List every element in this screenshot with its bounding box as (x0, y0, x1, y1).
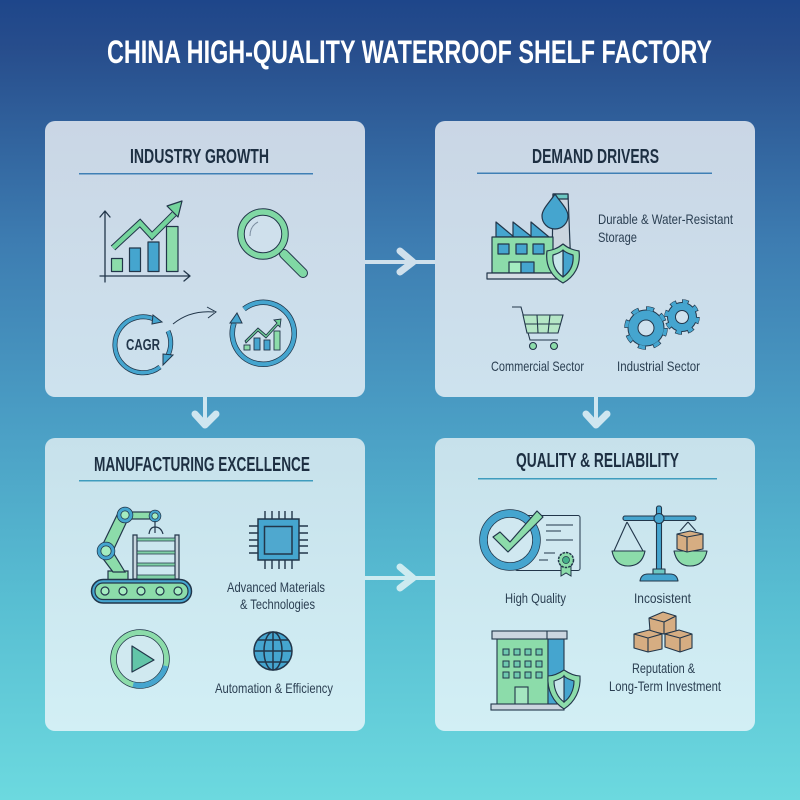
arrow: CAGR to growth ring (173, 307, 216, 324)
label: reputation: Reputation & (632, 660, 696, 676)
icon: magnifier (241, 212, 303, 273)
icon: growth chart (100, 201, 190, 282)
panel: industry growth (45, 121, 365, 397)
label: advanced materials: & Technologies (240, 596, 315, 612)
arrow: growth to demand (365, 251, 435, 272)
icon: certificate and check (484, 511, 580, 576)
icon: gears (626, 302, 698, 348)
label: commercial sector: Commercial Sector (491, 358, 584, 374)
arrow: growth to manufacturing (195, 397, 216, 425)
icon: building with shield (491, 631, 580, 710)
label: industrial sector: Industrial Sector (617, 358, 700, 374)
icon: shopping cart (512, 307, 563, 350)
heading: demand drivers: DEMAND DRIVERS (532, 146, 659, 168)
icon: stacked boxes (634, 612, 692, 652)
icon: robot arm and conveyor (92, 509, 192, 603)
icon: growth ring (230, 302, 294, 364)
heading: manufacturing excellence: MANUFACTURING EXCELLENCE (94, 454, 310, 476)
label: durable storage: Durable & Water-Resistant (598, 211, 733, 227)
label: CAGR: CAGR (126, 337, 160, 354)
icon: microchip (249, 511, 308, 569)
heading: industry growth: INDUSTRY GROWTH (130, 146, 269, 168)
icon: factory with drop and shield (487, 194, 579, 283)
label: durable storage: Storage (598, 229, 637, 245)
arrow: demand to quality (586, 397, 607, 425)
label: durable storage (598, 211, 733, 245)
icon: globe (254, 632, 292, 670)
label: high quality: High Quality (505, 590, 566, 606)
label: reputation: Long-Term Investment (609, 678, 721, 694)
panel: quality and reliability (435, 438, 755, 731)
icon: balance scale (612, 506, 707, 581)
icon: play button (114, 632, 166, 691)
icon: CAGR cycle (115, 315, 173, 373)
label: reputation (609, 660, 721, 694)
heading: quality and reliability: QUALITY & RELIABILITY (516, 450, 679, 472)
panel: manufacturing excellence (45, 438, 365, 731)
arrow: manufacturing to quality (365, 567, 435, 588)
label: automation: Automation & Efficiency (215, 680, 333, 696)
label: inconsistent: Incosistent (634, 590, 691, 606)
panel: demand drivers (435, 121, 755, 397)
label: advanced materials: Advanced Materials (227, 579, 325, 595)
label: advanced materials (227, 579, 325, 612)
